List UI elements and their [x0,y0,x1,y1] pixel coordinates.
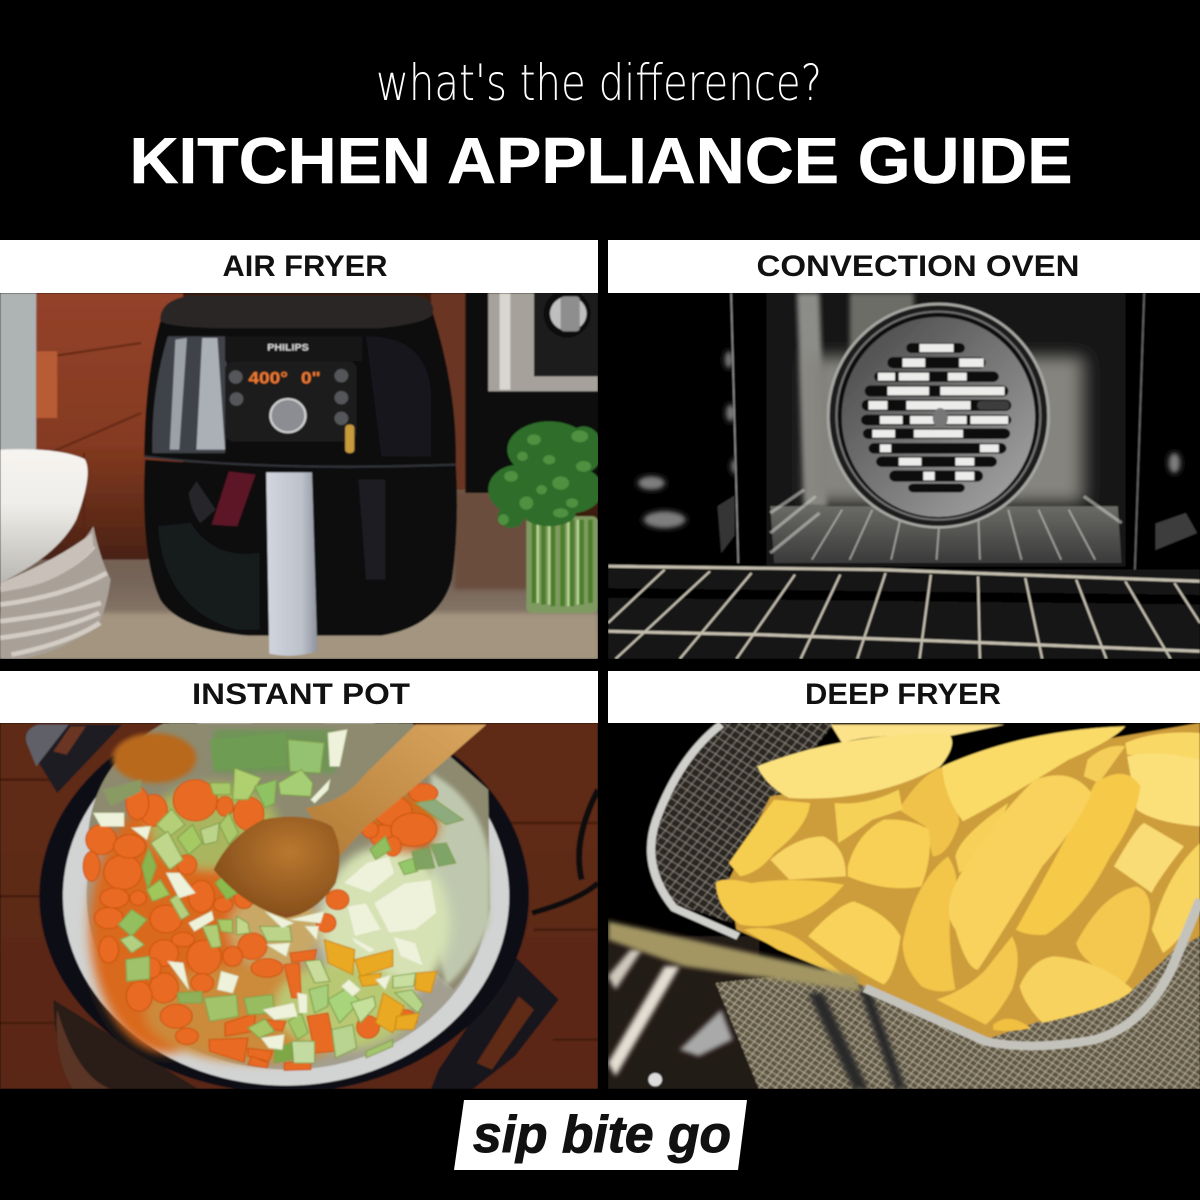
panel: convection oven [608,240,1200,659]
onion [93,730,437,1050]
icon: wooden spoon [214,725,486,918]
photo: instant pot with vegetables [0,700,598,1093]
icon: oven rack [608,566,1200,659]
photo: air fryer on kitchen counter [0,290,603,659]
photo: fries in deep fryer basket [608,723,1200,1089]
handle [266,472,317,656]
heading: deep fryer [608,671,1200,723]
heading: air fryer: AIR FRYER [222,250,388,283]
title: KITCHEN APPLIANCE GUIDE [130,124,1072,197]
panel: deep fryer [608,671,1200,1089]
icon: herbs in glass jar [488,421,603,613]
icon: convection fan [828,304,1049,527]
heading: convection oven: CONVECTION OVEN [756,250,1080,283]
icon: white bowl [0,449,88,583]
golden pepper pieces [324,940,437,1033]
control panel: PHILIPS [267,343,309,353]
control panel: 0" [301,369,321,387]
icon: wire basket [652,723,1200,1089]
heading: deep fryer: DEEP FRYER [805,678,1001,711]
icon: appliance behind [465,290,598,493]
logo: sip bite go: sip bite go [473,1106,731,1164]
icon: pot housing and handles [26,700,598,1093]
celery [103,733,463,1063]
icon: steel ring [63,707,509,1086]
control panel [225,343,357,453]
panel: instant pot [0,671,598,1093]
heading: instant pot [0,671,598,723]
icon: air fryer [144,296,457,656]
panel: air fryer [0,240,603,659]
photo: convection oven interior [608,293,1200,659]
control panel: 400° [248,369,288,387]
heading: instant pot: INSTANT POT [192,678,410,711]
icon: basket rim [651,724,1200,1046]
subtitle: what's the difference? [376,54,822,112]
heading: air fryer [0,240,598,293]
pot interior reflections [88,723,490,990]
icon: basket handle [608,921,859,991]
red tab [212,471,256,526]
heading: convection oven [608,240,1200,293]
vegetable base tones [90,783,450,1063]
fries [716,723,1200,1040]
icon: stacked plates [0,526,111,659]
carrots [83,780,438,1070]
